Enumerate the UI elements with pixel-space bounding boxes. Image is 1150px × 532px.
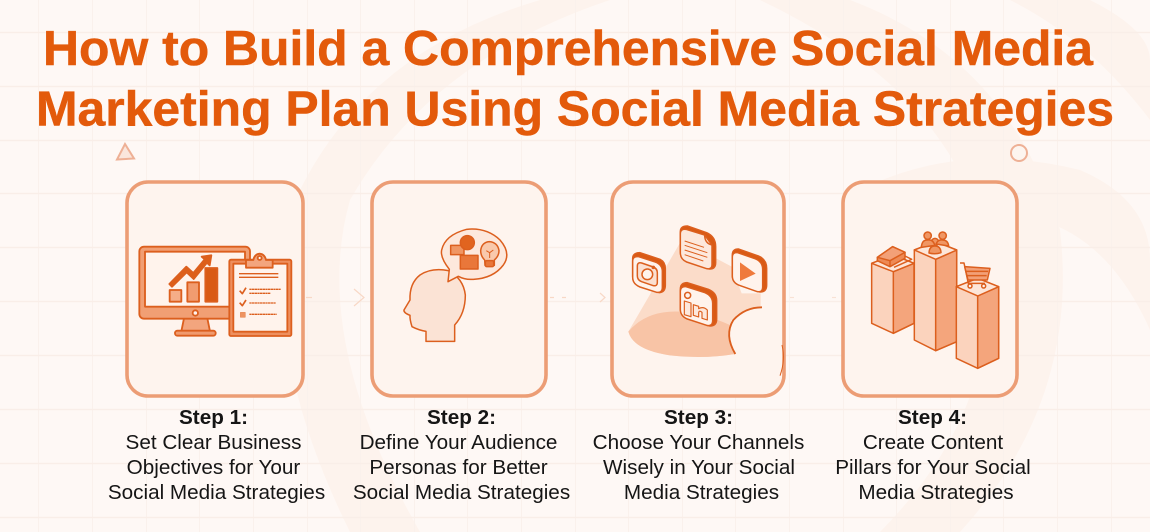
step 1 caption: Objectives for Your <box>127 456 300 479</box>
panel: step 1 <box>127 182 303 396</box>
document <box>680 226 716 269</box>
connector arrow 2 <box>550 293 605 302</box>
panel: step 3 <box>612 182 784 396</box>
connector arrow 1 <box>306 289 364 306</box>
step 2 caption: Social Media Strategies <box>353 481 570 504</box>
icon: content pillars <box>872 232 999 368</box>
play <box>732 249 767 292</box>
panel: step 2 <box>372 182 546 396</box>
step 2 caption: Personas for Better <box>369 456 548 479</box>
step 2 caption <box>353 406 570 504</box>
step 3 caption: Media Strategies <box>624 481 779 504</box>
step 4 caption: Create Content <box>863 431 1003 454</box>
step 2 caption: Step 2: <box>427 406 496 429</box>
step 3 caption <box>593 406 804 504</box>
step 3 caption: Step 3: <box>664 406 733 429</box>
instagram <box>633 253 665 293</box>
card 3 <box>612 182 784 396</box>
step 3 caption: Wisely in Your Social <box>603 456 795 479</box>
linkedin <box>680 283 717 326</box>
step 4 caption: Step 4: <box>898 406 967 429</box>
decorative triangle icon <box>117 144 134 160</box>
card 2 <box>372 182 546 396</box>
step 4 caption: Media Strategies <box>858 481 1014 504</box>
connector arrow 3 <box>790 296 836 298</box>
step 1 caption <box>108 406 325 504</box>
step 1 caption: Step 1: <box>179 406 248 429</box>
card 1 <box>127 182 303 396</box>
title: Marketing Plan Using Social Media Strategies <box>36 82 1114 136</box>
icon: monitor and clipboard <box>139 247 291 336</box>
decorative circle icon <box>1011 145 1027 161</box>
icon: head with speech bubble <box>404 229 507 341</box>
icon: social channels <box>628 226 783 376</box>
step 3 caption: Choose Your Channels <box>593 431 804 454</box>
card 4 <box>843 182 1017 396</box>
step 1 caption: Social Media Strategies <box>108 481 325 504</box>
panel: step 4 <box>843 182 1017 396</box>
step 4 caption: Pillars for Your Social <box>835 456 1031 479</box>
title: How to Build a Comprehensive Social Media <box>43 22 1094 76</box>
step 2 caption: Define Your Audience <box>360 431 557 454</box>
step 1 caption: Set Clear Business <box>126 431 301 454</box>
step 4 caption <box>835 406 1031 504</box>
title <box>36 22 1114 136</box>
